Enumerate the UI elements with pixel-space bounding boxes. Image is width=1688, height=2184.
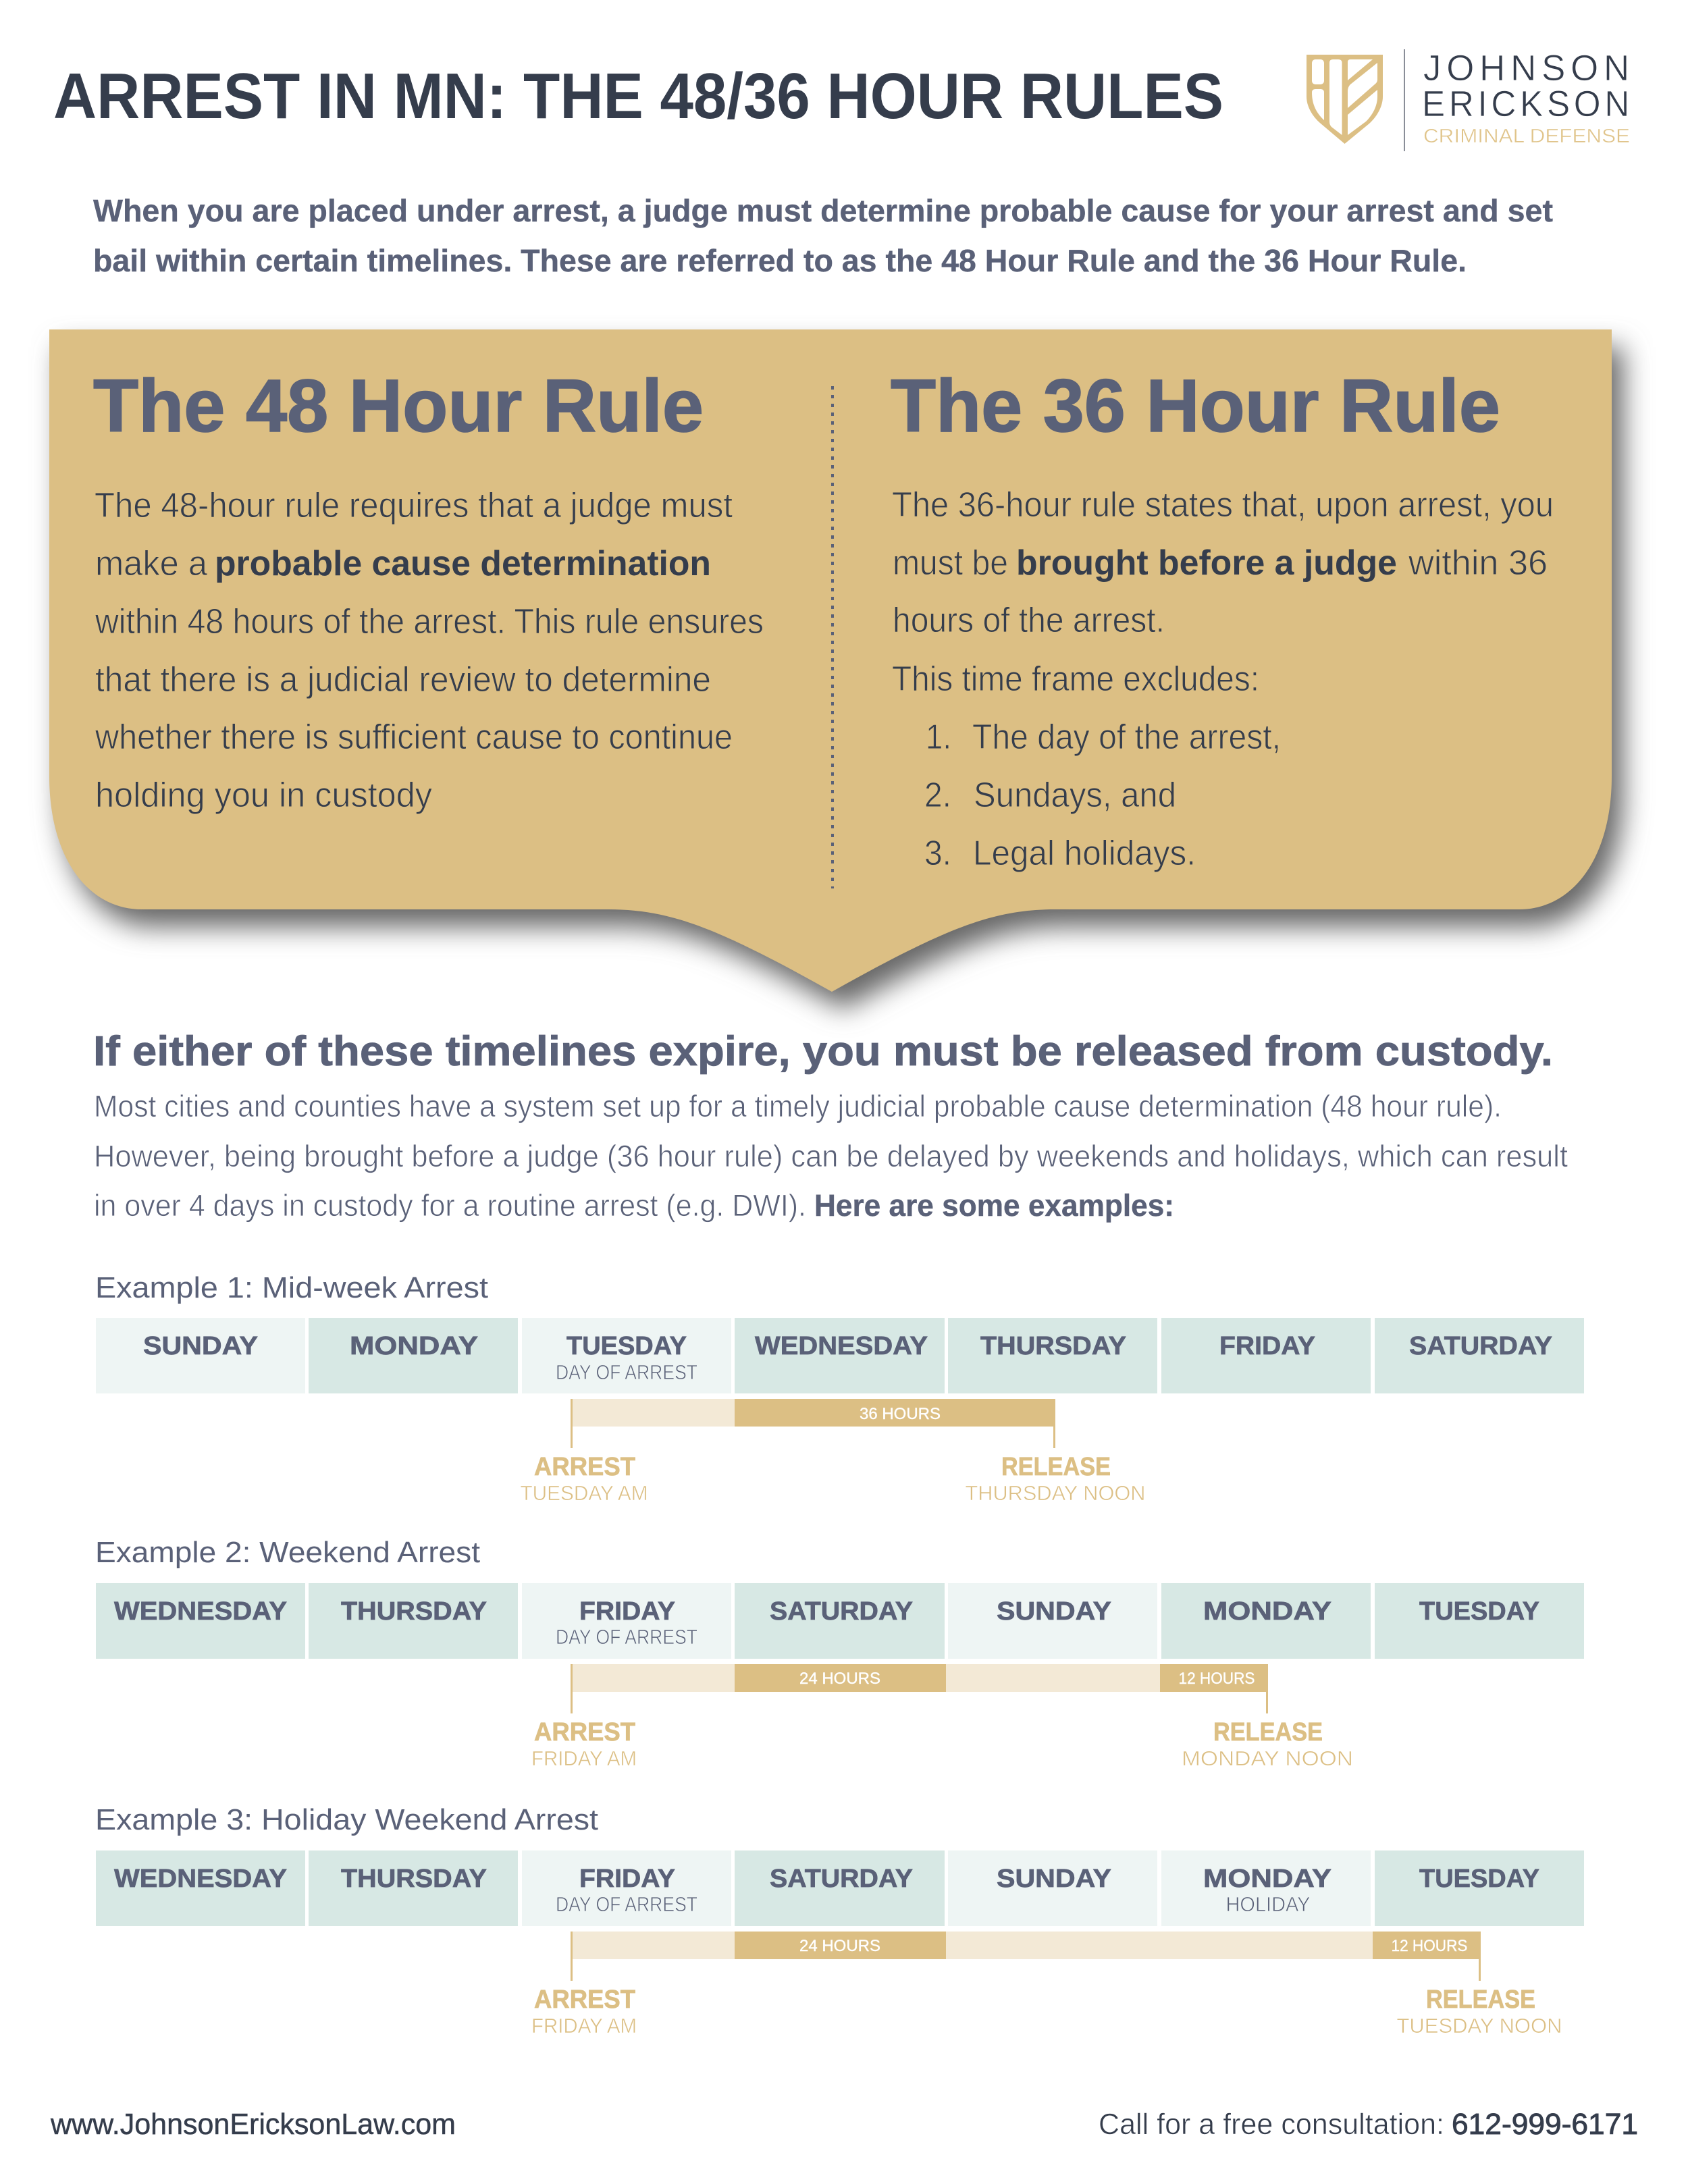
text block: 36 hour rule: Sundays, and <box>974 776 1176 815</box>
day: Monday <box>1161 1583 1371 1659</box>
text block: 36 hour rule: The 36-hour rule states that, upon arrest, you <box>892 485 1554 525</box>
release marker <box>966 1399 1145 1505</box>
arrest marker <box>531 1932 637 2037</box>
day: Monday: MONDAY <box>350 1332 478 1360</box>
day: Monday, holiday <box>1161 1850 1371 1926</box>
release marker: RELEASE <box>1213 1718 1323 1747</box>
text block: 48 hour rule: whether there is sufficient cause to continue <box>95 718 733 757</box>
text block: 36 hour rule: hours of the arrest. <box>893 601 1165 640</box>
arrest marker: ARREST <box>534 1718 635 1747</box>
day: Thursday: THURSDAY <box>341 1597 487 1626</box>
text block: 36 hour rule: This time frame excludes: <box>892 660 1259 699</box>
day: Wednesday <box>735 1318 945 1393</box>
day: Tuesday, day of arrest: TUESDAY <box>566 1332 687 1360</box>
text block: 48 hour rule: make a <box>95 544 207 583</box>
release marker: RELEASE <box>1001 1453 1111 1481</box>
day: Sunday: SUNDAY <box>997 1865 1111 1893</box>
duration bar: 12 HOURS <box>1391 1937 1468 1955</box>
arrest marker: FRIDAY AM <box>531 1747 637 1770</box>
logo wordmark: Erickson: ERICKSON <box>1422 84 1633 124</box>
example 2 timeline <box>95 1536 1584 1770</box>
text block: 36 hour rule <box>892 485 1554 873</box>
duration bar <box>572 1399 1055 1427</box>
text block: 36 hour rule: 2. <box>924 776 951 815</box>
section paragraph <box>94 1089 1568 1223</box>
day: Wednesday: WEDNESDAY <box>114 1865 287 1893</box>
arrest marker: TUESDAY AM <box>520 1481 648 1505</box>
day: Friday, day of arrest: DAY OF ARREST <box>556 1625 697 1649</box>
day: Thursday <box>309 1850 518 1926</box>
release marker <box>1182 1664 1353 1770</box>
text block: 36 hour rule: 3. <box>924 834 951 873</box>
section heading: If either of these timelines expire, you must be released from custody. <box>93 1028 1553 1075</box>
day: Thursday: THURSDAY <box>341 1865 487 1893</box>
footer call to action: 612-999-6171 <box>1452 2108 1638 2141</box>
release marker: RELEASE <box>1426 1986 1535 2014</box>
text block: 48 hour rule: holding you in custody <box>95 776 432 815</box>
day: Saturday <box>1375 1318 1584 1393</box>
heading: 48 hour rule: The 48 Hour Rule <box>93 365 704 448</box>
logo <box>1307 48 1635 151</box>
heading: 36 hour rule: The 36 Hour Rule <box>891 365 1500 448</box>
release marker: TUESDAY NOON <box>1396 2014 1562 2037</box>
day: Friday, day of arrest: FRIDAY <box>579 1865 675 1893</box>
day: Monday: MONDAY <box>1203 1597 1331 1626</box>
day: Saturday <box>735 1850 945 1926</box>
day: Saturday <box>735 1583 945 1659</box>
text block: 48 hour rule: probable cause determination <box>215 544 711 583</box>
day: Friday, day of arrest: FRIDAY <box>579 1597 675 1626</box>
day: Monday <box>309 1318 518 1393</box>
example 3 heading: Example 3: Holiday Weekend Arrest <box>95 1803 598 1836</box>
text block: 36 hour rule: brought before a judge <box>1016 543 1397 583</box>
day: Saturday: SATURDAY <box>770 1597 913 1626</box>
duration bar: 24 HOURS <box>799 1670 880 1688</box>
text block: 48 hour rule: The 48-hour rule requires that a judge must <box>95 486 733 525</box>
day: Sunday <box>948 1583 1157 1659</box>
text block: 36 hour rule: Legal holidays. <box>973 834 1196 873</box>
arrest marker <box>520 1399 648 1505</box>
day: Friday, day of arrest <box>522 1583 731 1659</box>
section paragraph: However, being brought before a judge (36 hour rule) can be delayed by weekends and holidays, which can result <box>94 1139 1568 1173</box>
icon: shield <box>1307 55 1383 144</box>
title: ARREST IN MN: THE 48/36 HOUR RULES <box>53 60 1223 132</box>
arrest marker: FRIDAY AM <box>531 2014 637 2037</box>
day: Friday: FRIDAY <box>1219 1332 1315 1360</box>
footer call to action: Call for a free consultation: <box>1099 2108 1444 2141</box>
day: Monday, holiday: MONDAY <box>1203 1865 1331 1893</box>
day: Thursday <box>948 1318 1157 1393</box>
day: Sunday: SUNDAY <box>997 1597 1111 1626</box>
section paragraph: in over 4 days in custody for a routine arrest (e.g. DWI). <box>94 1188 806 1223</box>
duration bar: 36 HOURS <box>860 1405 941 1423</box>
day: Thursday <box>309 1583 518 1659</box>
duration bar <box>572 1664 1268 1692</box>
day: Tuesday, day of arrest: DAY OF ARREST <box>556 1360 697 1384</box>
day: Sunday <box>96 1318 305 1393</box>
day: Tuesday: TUESDAY <box>1419 1597 1539 1626</box>
day: Monday, holiday: HOLIDAY <box>1226 1892 1310 1916</box>
example 3 timeline <box>95 1803 1584 2037</box>
text block: 36 hour rule: must be <box>893 543 1008 583</box>
day: Friday, day of arrest: DAY OF ARREST <box>556 1892 697 1916</box>
day: Tuesday <box>1375 1850 1584 1926</box>
example 1 timeline <box>95 1271 1584 1505</box>
arrest marker: ARREST <box>534 1453 635 1481</box>
day: Tuesday <box>1375 1583 1584 1659</box>
intro text <box>93 193 1553 278</box>
release marker <box>1396 1932 1562 2037</box>
text block: 48 hour rule: within 48 hours of the arrest. This rule ensures <box>95 602 764 641</box>
day: Wednesday: WEDNESDAY <box>114 1597 287 1626</box>
panel background shape <box>49 329 1612 992</box>
text block: 36 hour rule: The day of the arrest, <box>972 718 1281 757</box>
day: Thursday: THURSDAY <box>980 1332 1126 1360</box>
day: Saturday: SATURDAY <box>770 1865 913 1893</box>
example 1 heading: Example 1: Mid-week Arrest <box>95 1271 488 1304</box>
logo wordmark: Johnson: JOHNSON <box>1423 48 1635 88</box>
logo wordmark: Criminal Defense: CRIMINAL DEFENSE <box>1423 126 1630 147</box>
section paragraph: Most cities and counties have a system set up for a timely judicial probable cause determination (48 hour rule). <box>94 1089 1502 1123</box>
day: Sunday <box>948 1850 1157 1926</box>
release marker: THURSDAY NOON <box>966 1481 1145 1505</box>
intro text: When you are placed under arrest, a judge must determine probable cause for your arrest and set <box>93 193 1553 228</box>
day: Wednesday: WEDNESDAY <box>755 1332 928 1360</box>
release marker: MONDAY NOON <box>1182 1747 1353 1770</box>
day: Friday, day of arrest <box>522 1850 731 1926</box>
day: Tuesday, day of arrest <box>522 1318 731 1393</box>
duration bar <box>572 1932 1481 1959</box>
arrest marker <box>531 1664 637 1770</box>
text block: 48 hour rule <box>95 486 764 815</box>
text block: 48 hour rule: that there is a judicial review to determine <box>95 660 711 699</box>
example 2 heading: Example 2: Weekend Arrest <box>95 1536 480 1569</box>
arrest marker: ARREST <box>534 1986 635 2014</box>
day: Friday <box>1161 1318 1371 1393</box>
intro text: bail within certain timelines. These are referred to as the 48 Hour Rule and the 36 Hour Rule. <box>93 243 1467 278</box>
duration bar: 12 HOURS <box>1179 1670 1255 1688</box>
footer call to action <box>1099 2108 1638 2141</box>
panel: rules callout <box>49 329 1612 992</box>
day: Wednesday <box>96 1583 305 1659</box>
duration bar: 24 HOURS <box>799 1937 880 1955</box>
text block: 36 hour rule: 1. <box>926 718 951 757</box>
text block: 36 hour rule: within 36 <box>1408 543 1548 583</box>
day: Saturday: SATURDAY <box>1409 1332 1552 1360</box>
day: Tuesday: TUESDAY <box>1419 1865 1539 1893</box>
day: Wednesday <box>96 1850 305 1926</box>
section paragraph: Here are some examples: <box>814 1188 1174 1223</box>
footer website: www.JohnsonEricksonLaw.com <box>50 2108 456 2141</box>
day: Sunday: SUNDAY <box>143 1332 258 1360</box>
